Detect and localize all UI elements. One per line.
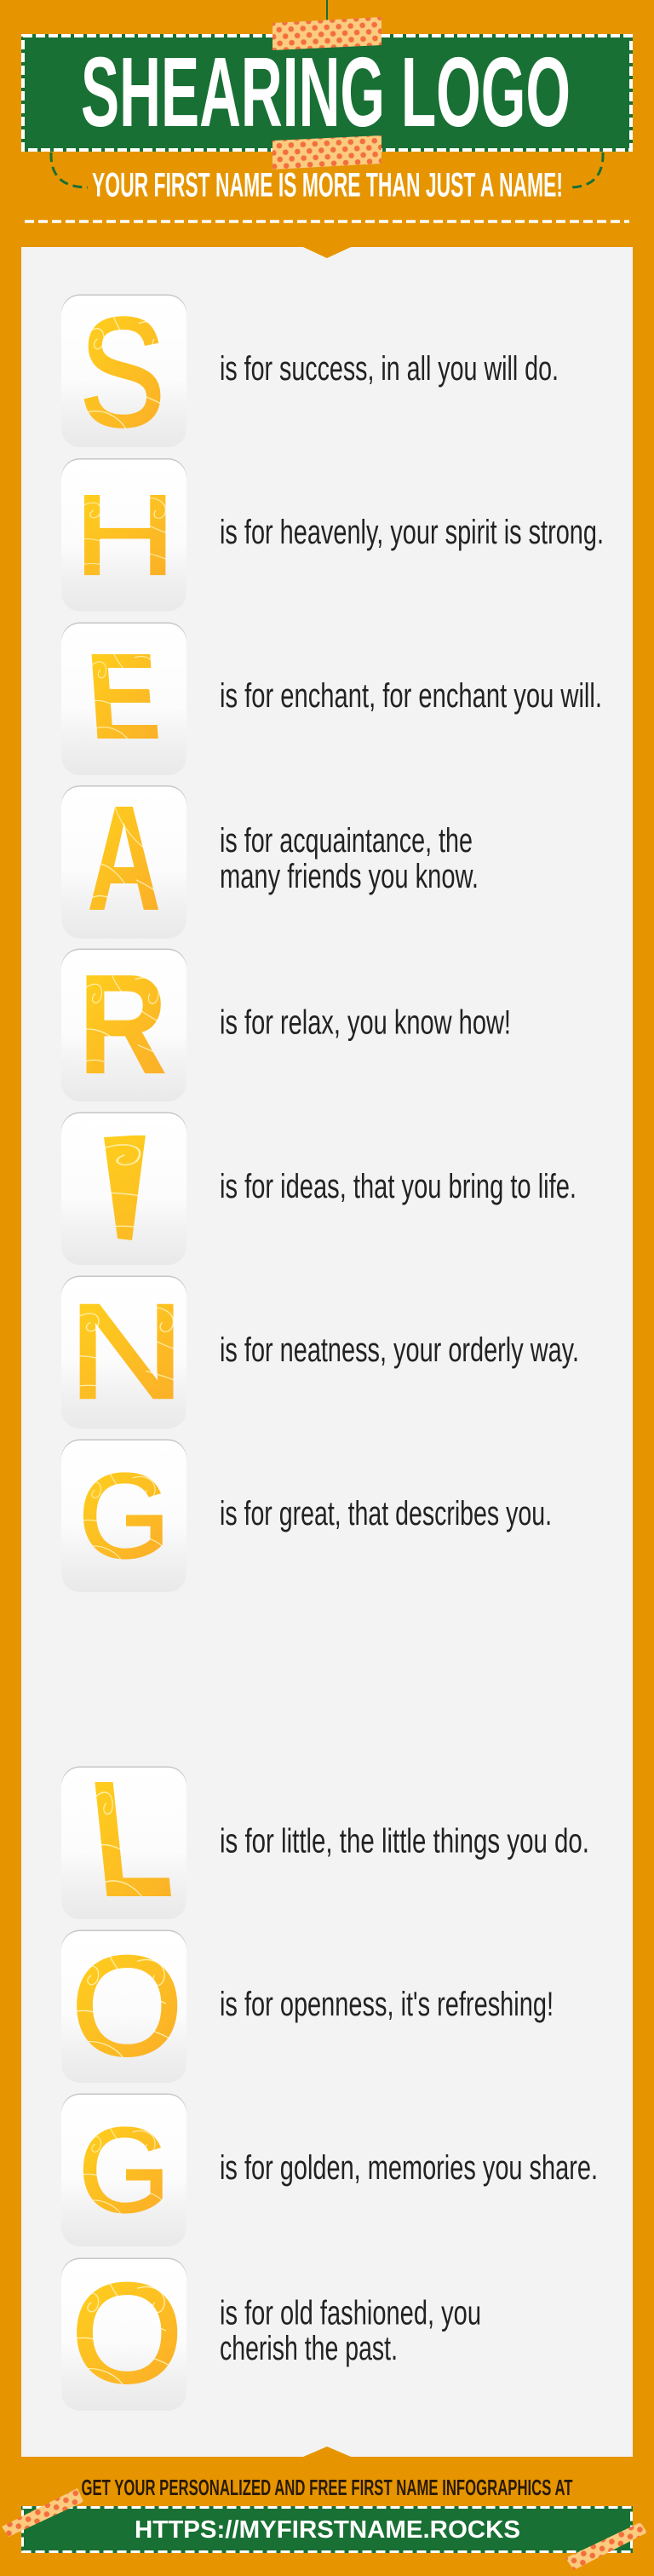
letter R: R bbox=[78, 945, 168, 1104]
row: R bbox=[61, 945, 511, 1104]
tape: footer right bbox=[565, 2522, 647, 2570]
letter G: G bbox=[78, 1448, 170, 1583]
row: E bbox=[61, 622, 602, 775]
letter O: O bbox=[72, 2253, 183, 2412]
row: O bbox=[61, 1926, 554, 2085]
letter G: G bbox=[78, 2102, 170, 2237]
hanging string bbox=[326, 0, 328, 22]
letter A: A bbox=[87, 773, 161, 941]
row: O (second) bbox=[61, 2253, 481, 2412]
row: I bbox=[61, 1102, 577, 1273]
row: H bbox=[61, 458, 604, 612]
row: A bbox=[61, 773, 479, 941]
row: N bbox=[61, 1276, 579, 1429]
tape: bottom of banner bbox=[272, 135, 382, 170]
letter N: N bbox=[68, 1276, 186, 1427]
dashed connector: right bbox=[570, 152, 603, 187]
row: G bbox=[61, 1440, 552, 1592]
text: A: is for acquaintance, the bbox=[220, 822, 473, 860]
footer url: HTTPS://MYFIRSTNAME.ROCKS bbox=[135, 2516, 520, 2544]
letter E: E bbox=[83, 628, 164, 765]
text: O: cherish the past. bbox=[220, 2330, 398, 2367]
row: L bbox=[61, 1745, 589, 1932]
text: O: is for old fashioned, you bbox=[220, 2295, 481, 2332]
text: A bbox=[220, 822, 479, 895]
letter S: S bbox=[79, 287, 165, 459]
footer banner bbox=[21, 2506, 633, 2553]
row: S bbox=[61, 287, 559, 459]
tape: footer left bbox=[2, 2488, 83, 2537]
letter L: L bbox=[83, 1745, 179, 1932]
text: A: many friends you know. bbox=[220, 858, 479, 895]
letter H: H bbox=[74, 471, 176, 598]
dashed connector: left bbox=[51, 152, 88, 187]
header banner bbox=[21, 34, 633, 152]
row: G (second) bbox=[61, 2094, 598, 2246]
letter I: I bbox=[83, 1102, 166, 1273]
tape: top of banner bbox=[272, 17, 382, 50]
text: R: is for relax, you know how! bbox=[220, 1003, 511, 1041]
letter O: O bbox=[72, 1926, 183, 2085]
text: O bbox=[220, 2295, 481, 2367]
